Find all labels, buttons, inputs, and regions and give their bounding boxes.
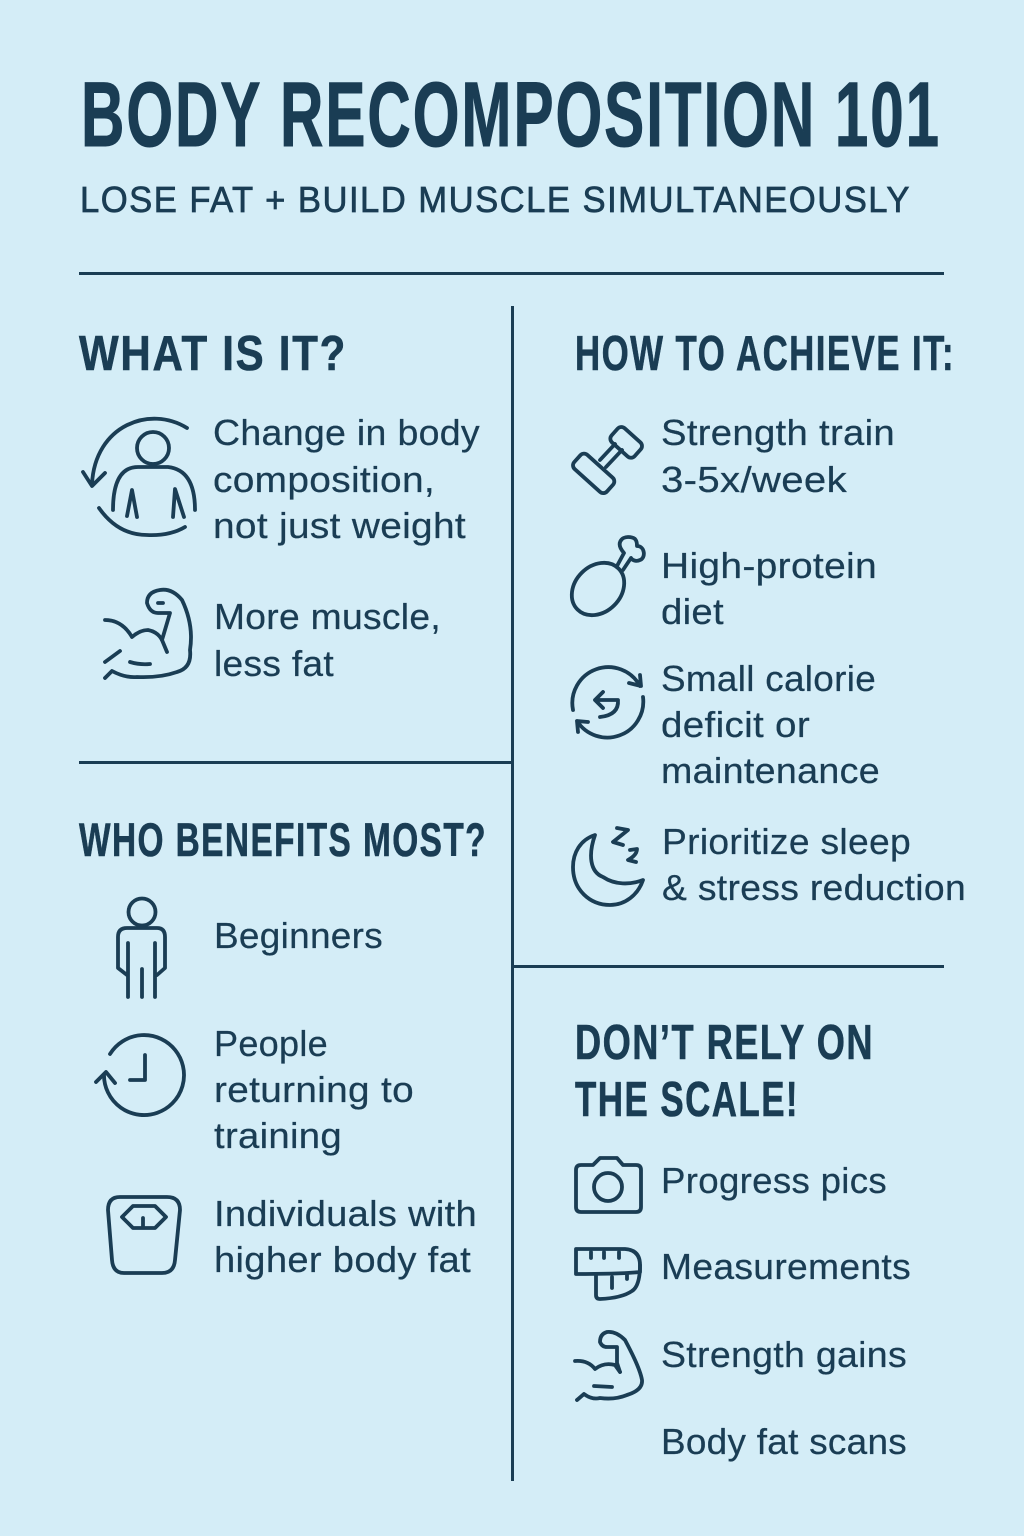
icon: moon and z's (573, 828, 643, 905)
text: progress pics: Progress pics (661, 1160, 887, 1201)
text: strength train: 3-5x/week (661, 459, 848, 500)
text: beginners: Beginners (214, 915, 383, 956)
panel: what is it (79, 327, 480, 684)
text: strength train: Strength train (661, 412, 895, 453)
heading: don't rely on the scale: THE SCALE! (575, 1073, 799, 1127)
icon: bathroom scale (108, 1197, 180, 1273)
text: high protein diet (661, 545, 877, 632)
text: small calorie deficit: deficit or (661, 704, 810, 745)
text: measurements: Measurements (661, 1246, 911, 1287)
text: change in body composition: composition, (213, 459, 435, 500)
icon: dumbbell (571, 425, 644, 495)
text: high protein diet: High-protein (661, 545, 877, 586)
panel: don't rely on the scale (575, 1016, 911, 1462)
text: people returning: People (214, 1023, 328, 1064)
text: people returning: returning to (214, 1069, 414, 1110)
text: more muscle less fat (214, 596, 441, 684)
text: individuals with higher body fat: Individuals with (214, 1193, 477, 1234)
icon: flexed arm small (575, 1332, 642, 1400)
panel: who benefits most (79, 813, 487, 1280)
icon: chicken drumstick (561, 537, 644, 626)
text: body fat scans: Body fat scans (661, 1421, 907, 1462)
text: change in body composition (213, 412, 480, 546)
text: individuals with higher body fat (214, 1193, 477, 1280)
text: prioritize sleep (662, 821, 966, 908)
subtitle: LOSE FAT + BUILD MUSCLE SIMULTANEOUSLY (80, 179, 911, 220)
text: strength train (661, 412, 895, 500)
icon: flexed arm (105, 590, 191, 678)
icon: clock with return arrow (96, 1035, 184, 1115)
text: people returning: training (214, 1115, 342, 1156)
icon: person (118, 898, 165, 997)
icon: measuring tape (576, 1249, 640, 1299)
panel: how to achieve it (561, 327, 966, 908)
heading: who benefits most: WHO BENEFITS MOST? (79, 813, 487, 866)
text: more muscle less fat: More muscle, (214, 596, 441, 637)
heading: don't rely on the scale: DON’T RELY ON (575, 1016, 874, 1070)
text: prioritize sleep: & stress reduction (662, 867, 966, 908)
icon: person with rotation arrows (83, 419, 195, 535)
text: small calorie deficit (661, 658, 880, 791)
text: individuals with higher body fat: higher body fat (214, 1239, 471, 1280)
heading: what is it: WHAT IS IT? (79, 327, 347, 381)
icon: camera (576, 1158, 641, 1212)
text: change in body composition: not just weight (213, 505, 466, 546)
text: more muscle less fat: less fat (214, 643, 334, 684)
header (80, 64, 941, 220)
text: small calorie deficit: Small calorie (661, 658, 876, 699)
heading: don't rely on the scale (575, 1016, 874, 1127)
text: prioritize sleep: Prioritize sleep (662, 821, 911, 862)
text: high protein diet: diet (661, 591, 724, 632)
text: people returning (214, 1023, 414, 1156)
icon: calorie cycle (572, 667, 643, 738)
text: change in body composition: Change in body (213, 412, 480, 453)
text: small calorie deficit: maintenance (661, 750, 880, 791)
text: strength gains: Strength gains (661, 1334, 907, 1375)
